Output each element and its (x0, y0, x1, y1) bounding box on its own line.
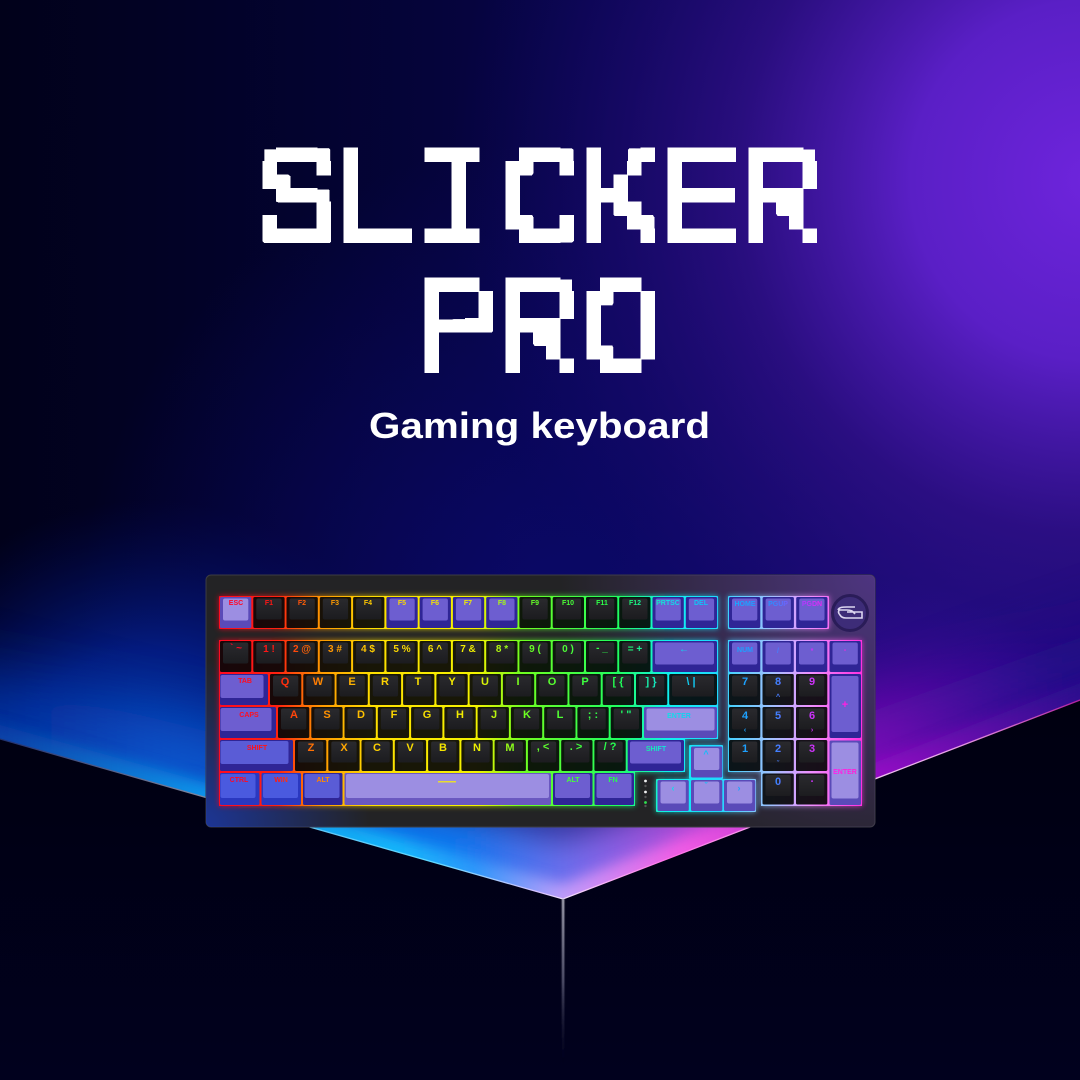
numeric keypad: ‹ (744, 727, 747, 734)
keyboard (206, 575, 875, 827)
home row: S (323, 709, 331, 721)
number row: ` ~ (230, 643, 242, 654)
shift row: . > (570, 741, 582, 753)
shift row: / ? (604, 741, 617, 753)
qwerty row: E (348, 676, 356, 688)
shift row: N (473, 742, 481, 754)
function key row: F11 (596, 600, 608, 607)
numeric keypad: 9 (809, 676, 815, 688)
number row: 9 ( (529, 644, 542, 655)
numeric keypad: › (811, 727, 814, 734)
floor (0, 700, 1080, 1080)
number row: ← (679, 644, 689, 655)
shift row: Z (308, 742, 315, 754)
numeric keypad: NUM (737, 647, 753, 654)
home row: CAPS (239, 712, 259, 719)
shift row: X (340, 742, 348, 754)
numeric keypad (729, 641, 861, 805)
function key row (220, 597, 828, 628)
qwerty row: Y (448, 676, 456, 688)
function key row: F10 (562, 600, 574, 607)
numeric keypad: 2 (775, 743, 781, 755)
home row: D (357, 709, 365, 721)
icon: brand logo badge (832, 596, 868, 630)
numeric keypad: * (811, 648, 814, 655)
numeric keypad: ^ (776, 693, 780, 701)
home row: L (557, 709, 564, 721)
numeric keypad: 7 (742, 676, 748, 688)
home row: G (423, 709, 431, 721)
shift row: C (373, 742, 381, 754)
number row: 4 $ (361, 644, 375, 655)
numeric keypad: - (844, 647, 847, 654)
keyboard body (206, 575, 875, 827)
shift row: SHIFT (646, 746, 667, 753)
qwerty row: \ | (686, 676, 696, 688)
home row: A (290, 709, 298, 721)
home row: K (523, 709, 531, 721)
rgb backlight glow (219, 596, 862, 812)
number row: = + (628, 644, 642, 655)
numeric keypad: 0 (775, 776, 781, 788)
number row: 8 * (496, 644, 508, 655)
shift row: M (505, 742, 515, 754)
number row: 2 @ (293, 644, 311, 655)
qwerty row: T (415, 676, 422, 688)
title line: PRO: PRO (415, 256, 665, 415)
numeric keypad: 5 (775, 710, 781, 722)
shift row (220, 740, 684, 771)
number row (220, 641, 717, 672)
qwerty row (220, 674, 717, 705)
vertical light stem (562, 899, 564, 1064)
function key row: DEL (694, 600, 709, 607)
home row: J (491, 709, 497, 721)
bottom modifier row and space bar: ALT (316, 777, 330, 784)
qwerty row: O (548, 676, 557, 688)
shift row: SHIFT (247, 745, 268, 752)
function key row: F2 (298, 600, 306, 607)
shift row: V (406, 742, 414, 754)
function key row: ESC (229, 600, 243, 607)
function key row: F4 (364, 600, 372, 607)
function key row: PGDN (802, 601, 822, 608)
function key row: F6 (431, 600, 439, 607)
home row: ; : (588, 709, 598, 721)
number row: 0 ) (562, 644, 574, 655)
numeric keypad: / (777, 648, 779, 655)
function key row: F3 (331, 600, 339, 607)
arrow keys: › (738, 783, 740, 793)
qwerty row: I (516, 676, 520, 688)
bottom modifier row and space bar (220, 773, 634, 805)
function key row: F1 (265, 600, 273, 607)
qwerty row: W (313, 676, 324, 688)
number row: - _ (596, 643, 608, 654)
qwerty row: TAB (238, 678, 252, 685)
home row: ' " (621, 709, 631, 721)
function key row: PRTSC (656, 600, 680, 607)
number row: 7 & (460, 644, 476, 655)
home row: ENTER (667, 713, 691, 720)
function key row: F9 (531, 600, 539, 607)
bottom modifier row and space bar: ALT (566, 777, 580, 784)
subtitle: Gaming keyboard (369, 405, 710, 446)
shift row: B (439, 742, 447, 754)
numeric keypad: . (810, 773, 814, 785)
bottom modifier row and space bar: FN (608, 777, 618, 784)
qwerty row: R (381, 676, 389, 688)
number row: 1 ! (263, 644, 275, 655)
function key row: F8 (498, 600, 506, 607)
status LEDs (644, 780, 647, 807)
title line: SLICKER: SLICKER (255, 126, 824, 285)
shift row: , < (537, 741, 549, 753)
numeric keypad: 3 (809, 743, 815, 755)
numeric keypad: + (842, 699, 848, 711)
arrow keys: ^ (703, 749, 709, 759)
numeric keypad: 6 (809, 710, 815, 722)
qwerty row: P (581, 676, 589, 688)
function key row: HOME (734, 601, 756, 608)
function key row: F5 (398, 600, 406, 607)
qwerty row: Q (281, 676, 290, 688)
numeric keypad: 1 (742, 743, 748, 755)
arrow keys: ˇ (704, 781, 708, 791)
arrow keys (658, 746, 755, 811)
bottom modifier row and space bar: CTRL (230, 777, 249, 784)
qwerty row: ] } (646, 676, 657, 688)
function key row: PGUP (768, 601, 788, 608)
numeric keypad: 8 (775, 676, 781, 688)
number row: 3 # (328, 644, 342, 655)
numeric keypad: ˇ (777, 760, 780, 768)
numeric keypad: 4 (742, 710, 749, 722)
function key row: F7 (464, 600, 472, 607)
home row: H (456, 709, 464, 721)
home row: F (391, 709, 398, 721)
numeric keypad: ENTER (833, 769, 857, 776)
glowing V-shaped light above the floor (0, 524, 1080, 898)
arrow keys: ‹ (672, 783, 674, 793)
rgb key outlines (219, 596, 862, 812)
number row: 5 % (393, 644, 411, 655)
home row (220, 707, 717, 738)
number row: 6 ^ (428, 644, 442, 655)
qwerty row: [ { (612, 676, 624, 688)
light edge of the floor (0, 700, 1080, 899)
qwerty row: U (481, 676, 489, 688)
function key row: F12 (629, 600, 641, 607)
bottom modifier row and space bar: WIN (274, 777, 288, 784)
